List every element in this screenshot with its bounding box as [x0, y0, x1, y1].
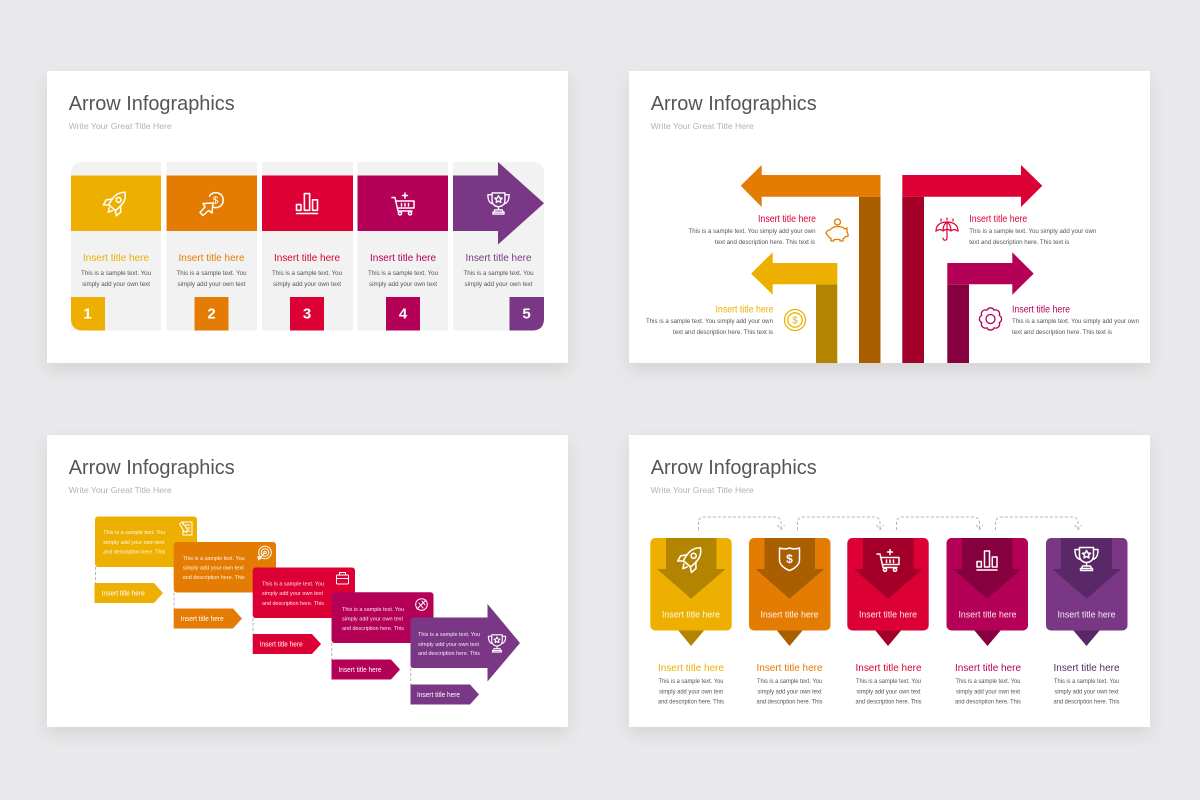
- text block: yellow title left: [646, 304, 774, 336]
- card 1 text: This is a sample text. You: [658, 678, 724, 685]
- column 4: [358, 176, 448, 330]
- card 4 label: Insert title here: [958, 610, 1016, 620]
- step 5 text: and description here. This: [418, 651, 480, 657]
- number 2: 2: [207, 306, 216, 322]
- text block: yellow title left: This is a sample text. You simply add your own: [646, 318, 773, 325]
- card 4: [946, 538, 1028, 706]
- panel: staircase cards: [47, 435, 568, 727]
- column 2: simply add your own text: [178, 281, 246, 288]
- icon: coin: [784, 310, 806, 330]
- step 2 text: simply add your own text: [183, 566, 244, 572]
- arrow: orange left: [741, 165, 880, 363]
- column 5: simply add your own text: [464, 281, 533, 288]
- panel: bent arrows: [629, 71, 1150, 363]
- heading: Arrow Infographics: [69, 93, 235, 115]
- step 2 text: [183, 556, 245, 581]
- step 2: [174, 542, 276, 628]
- card 1 title: Insert title here: [658, 662, 724, 674]
- icon: trophy: [1075, 548, 1098, 570]
- card 1 text: and description here. This: [658, 699, 724, 706]
- step 5 text: simply add your own text: [418, 642, 479, 648]
- arrow: yellow left: [751, 252, 837, 363]
- column 3: [262, 176, 353, 330]
- arrow: red right: [902, 165, 1042, 363]
- text block: magenta title: [1012, 304, 1139, 336]
- card 1 text: [658, 678, 724, 706]
- card 2 text: simply add your own text: [758, 688, 822, 695]
- step 1 text: [103, 530, 165, 556]
- column 2 title: Insert title here: [178, 252, 245, 264]
- step 4 text: simply add your own text: [342, 616, 403, 622]
- text block: yellow title left: Insert title here: [716, 304, 774, 316]
- step 5: [410, 604, 520, 704]
- column 2 text: This is a sample text. You: [176, 270, 247, 277]
- card 4 text: [955, 678, 1021, 706]
- step 1 title arrow: Insert title here: [102, 588, 145, 598]
- panel: five-column arrow: [47, 71, 568, 363]
- card 5 text: simply add your own text: [1054, 688, 1119, 695]
- card 3 text: and description here. This: [856, 699, 922, 706]
- step 3 text: and description here. This: [262, 601, 324, 607]
- icon: bar chart: [296, 194, 318, 213]
- card 3 text: simply add your own text: [856, 688, 921, 695]
- number 4: [386, 297, 420, 330]
- card 4 text: and description here. This: [955, 699, 1021, 706]
- icon: target: [258, 546, 271, 560]
- heading: Arrow Infographics: [69, 457, 235, 479]
- text block: magenta title: text and description here. This text is: [1012, 329, 1112, 336]
- number 5: 5: [522, 306, 531, 322]
- card 5 text: and description here. This: [1054, 699, 1120, 706]
- icon: dollar target: [200, 193, 223, 216]
- number 2: [194, 297, 228, 330]
- card 3 text: [856, 678, 922, 706]
- column 1 text: This is a sample text. You: [81, 270, 151, 277]
- text block: yellow title left: text and description here. This text is: [673, 329, 773, 336]
- step 3 text: [262, 582, 324, 607]
- step 4: [332, 592, 434, 680]
- card 5: [1046, 538, 1128, 706]
- card 5 label: Insert title here: [1058, 610, 1116, 620]
- card 5 title: Insert title here: [1054, 662, 1120, 674]
- card 2 label: Insert title here: [760, 610, 818, 620]
- step 4 text: and description here. This: [342, 626, 404, 632]
- grey columns: [71, 162, 544, 330]
- column 5: [453, 162, 544, 330]
- column 1 title: Insert title here: [83, 252, 149, 264]
- step 1 text: simply add your own text: [103, 540, 165, 546]
- icon: shield: $: [786, 552, 793, 566]
- heading: Arrow Infographics: [651, 457, 817, 479]
- text block: red title right: [969, 213, 1097, 246]
- icon: piggy bank: [826, 219, 848, 241]
- number 3: [290, 297, 324, 330]
- column 3: simply add your own text: [273, 281, 341, 288]
- subheading: Write Your Great Title Here: [69, 121, 172, 131]
- icon: blocked circle: [416, 599, 427, 610]
- card 1 label: Insert title here: [662, 610, 720, 620]
- text block: red title right: Insert title here: [969, 213, 1027, 225]
- arrow: dashed connectors: [698, 517, 1082, 530]
- card 4 text: This is a sample text. You: [956, 678, 1021, 685]
- column 5 text: This is a sample text. You: [464, 270, 534, 277]
- step 1 text: This is a sample text. You: [103, 530, 165, 536]
- column 1: [71, 176, 161, 330]
- text block: magenta title: This is a sample text. You simply add your own: [1012, 318, 1139, 325]
- text block: red title left: Insert title here: [758, 213, 816, 225]
- heading: Arrow Infographics: [651, 93, 817, 115]
- text block: red title left: This is a sample text. You simply add your own: [688, 228, 816, 235]
- card 3 title: Insert title here: [856, 662, 922, 674]
- number 1: [71, 297, 105, 330]
- card 1 text: simply add your own text: [659, 688, 723, 695]
- number 4: 4: [399, 306, 408, 322]
- card 4 title: Insert title here: [955, 662, 1021, 674]
- card 5 text: This is a sample text. You: [1054, 678, 1119, 685]
- icon: rocket: [675, 541, 708, 575]
- card 2 title: Insert title here: [756, 662, 823, 674]
- icon: document: [180, 522, 192, 535]
- text block: magenta title: Insert title here: [1012, 304, 1070, 316]
- icon: shopping cart: [877, 550, 899, 571]
- step 2 title arrow: Insert title here: [181, 614, 224, 623]
- panel: down-arrow cards: [629, 435, 1150, 727]
- step 4 text: This is a sample text. You: [342, 607, 404, 613]
- subheading: Write Your Great Title Here: [69, 485, 172, 495]
- step 1: [94, 516, 197, 603]
- card 2 text: [756, 678, 822, 706]
- icon: bar chart: [977, 551, 997, 570]
- column 5 title: Insert title here: [466, 252, 532, 264]
- step 3 text: simply add your own text: [262, 591, 323, 597]
- step 3 text: This is a sample text. You: [262, 582, 324, 588]
- step 2 text: This is a sample text. You: [183, 556, 245, 562]
- connector dashes: [96, 567, 411, 684]
- icon: dollar target: $: [213, 196, 219, 206]
- step 4 text: [342, 607, 404, 632]
- arrow: magenta right: [947, 252, 1034, 363]
- step 5 text: This is a sample text. You: [418, 632, 480, 638]
- card 4 text: simply add your own text: [956, 688, 1020, 695]
- step 5 title arrow: Insert title here: [417, 690, 460, 699]
- icon: umbrella: [936, 218, 958, 240]
- icon: rocket: [101, 186, 132, 218]
- text block: red title right: text and description here. This text is: [969, 239, 1069, 246]
- column 4 title: Insert title here: [370, 252, 436, 264]
- step 3: [253, 568, 355, 654]
- icon: coin: $: [792, 316, 798, 326]
- card 1: [650, 538, 732, 706]
- column 4: simply add your own text: [369, 281, 437, 288]
- step 4 title arrow: Insert title here: [338, 665, 382, 674]
- column 3 text: This is a sample text. You: [272, 270, 342, 277]
- card 3: [847, 538, 929, 706]
- text block: red title left: [688, 213, 816, 246]
- column 1: simply add your own text: [82, 281, 150, 288]
- column 3 title: Insert title here: [274, 252, 340, 264]
- text block: red title left: text and description here. This text is: [715, 239, 815, 246]
- text block: red title right: This is a sample text. You simply add your own: [969, 228, 1097, 235]
- column 2: [166, 176, 257, 330]
- card 3 text: This is a sample text. You: [856, 678, 921, 685]
- card 2: [749, 538, 830, 706]
- icon: briefcase: [336, 572, 348, 584]
- step 5 text: [418, 632, 480, 657]
- step 1 text: and description here. This: [103, 550, 165, 556]
- icon: flower: [979, 308, 1002, 330]
- card 2 text: This is a sample text. You: [757, 678, 822, 685]
- card 3 label: Insert title here: [859, 610, 917, 620]
- step 3 title arrow: Insert title here: [260, 640, 303, 648]
- subheading: Write Your Great Title Here: [651, 121, 754, 131]
- step 2 text: and description here. This: [183, 575, 245, 581]
- icon: trophy: [488, 193, 509, 214]
- card 2 text: and description here. This: [756, 699, 822, 706]
- icon: shopping cart: [392, 193, 414, 215]
- number 3: 3: [303, 306, 311, 322]
- column 4 text: This is a sample text. You: [368, 270, 438, 277]
- icon: shield: [780, 548, 800, 570]
- subheading: Write Your Great Title Here: [651, 485, 754, 495]
- number 5: [510, 297, 544, 330]
- icon: trophy: [488, 635, 506, 652]
- number 1: 1: [83, 306, 92, 322]
- card 5 text: [1054, 678, 1120, 706]
